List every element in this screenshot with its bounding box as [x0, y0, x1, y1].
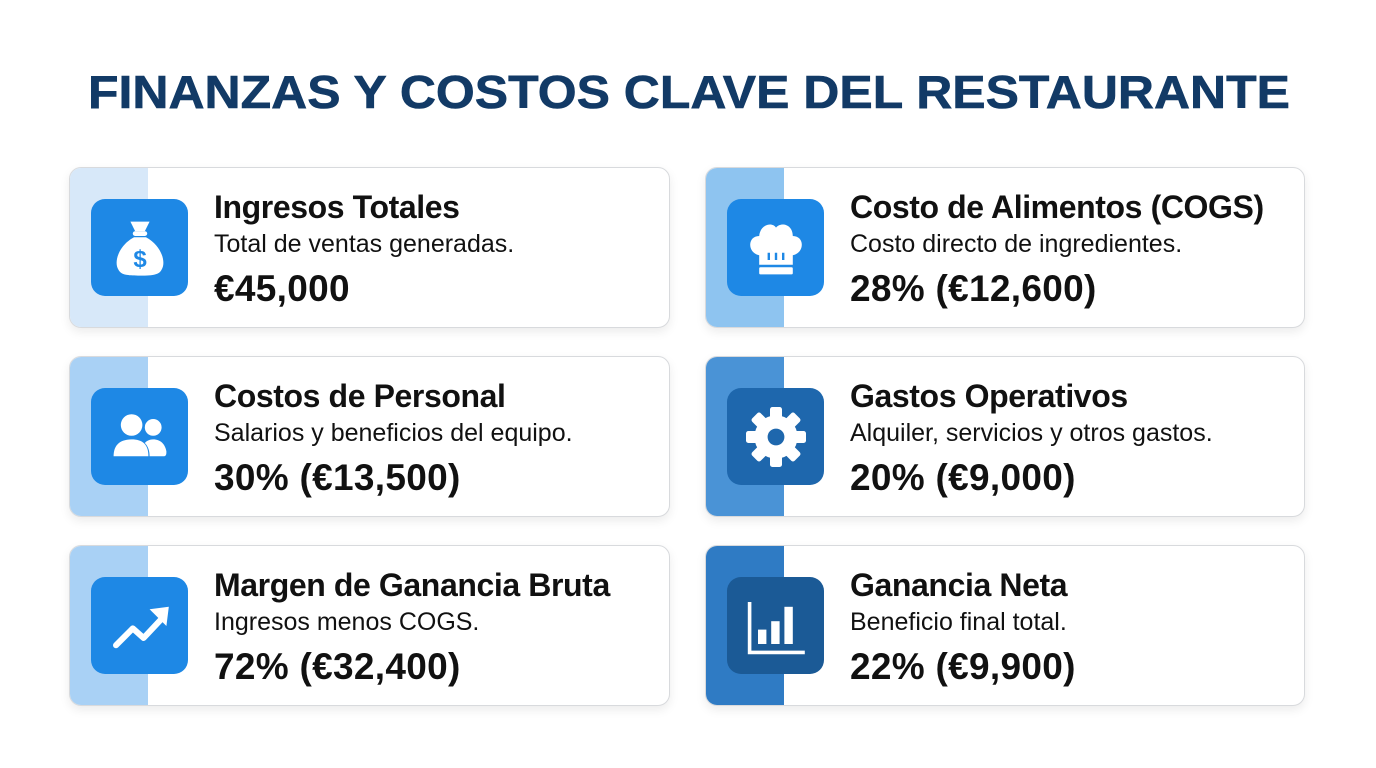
icon: gear [727, 388, 824, 485]
icon: people [91, 388, 188, 485]
panel: ingresos totales [69, 167, 670, 328]
text: neta: Ganancia Neta [850, 567, 1067, 603]
text: cogs: 28% (€12,600) [850, 268, 1097, 309]
text: cogs: Costo directo de ingredientes. [850, 230, 1182, 258]
text: margen [214, 567, 610, 687]
text: personal: 30% (€13,500) [214, 457, 461, 498]
text: margen: 72% (€32,400) [214, 646, 461, 687]
text: neta [850, 567, 1076, 687]
text: ingresos: €45,000 [214, 268, 350, 309]
text: gastos: Alquiler, servicios y otros gastos. [850, 419, 1213, 447]
text: neta: 22% (€9,900) [850, 646, 1076, 687]
icon: money bag: $ [133, 246, 147, 273]
text: margen: Ingresos menos COGS. [214, 608, 479, 636]
panel: costos de personal [69, 356, 670, 517]
text: margen: Margen de Ganancia Bruta [214, 567, 610, 603]
text: personal: Costos de Personal [214, 378, 506, 414]
panel: margen bruto [69, 545, 670, 706]
text: cogs [850, 189, 1264, 309]
panel: ganancia neta [705, 545, 1305, 706]
text: personal [214, 378, 573, 498]
title: FINANZAS Y COSTOS CLAVE DEL RESTAURANTE [88, 66, 1290, 118]
text: neta: Beneficio final total. [850, 608, 1067, 636]
text: gastos: Gastos Operativos [850, 378, 1128, 414]
text: cogs: Costo de Alimentos (COGS) [850, 189, 1264, 225]
icon: bar chart [727, 577, 824, 674]
text: ingresos [214, 189, 514, 309]
text: ingresos: Ingresos Totales [214, 189, 460, 225]
icon: money bag [91, 199, 188, 296]
panel: costo de alimentos [705, 167, 1305, 328]
text: personal: Salarios y beneficios del equipo. [214, 419, 573, 447]
icon: trend arrow [91, 577, 188, 674]
text: ingresos: Total de ventas generadas. [214, 230, 514, 258]
text: gastos: 20% (€9,000) [850, 457, 1076, 498]
panel: gastos operativos [705, 356, 1305, 517]
text: gastos [850, 378, 1213, 498]
icon: chef hat [727, 199, 824, 296]
